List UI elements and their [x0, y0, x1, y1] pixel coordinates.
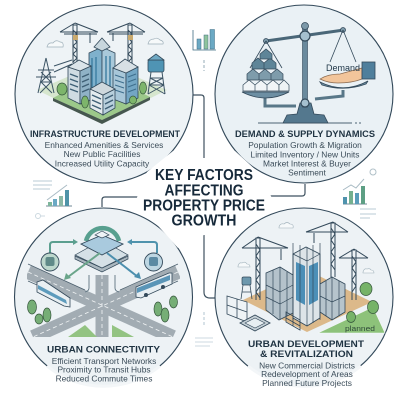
- illustration: balance scale: [242, 22, 375, 123]
- text: development details: Planned Future Projects: [262, 378, 352, 388]
- panel: urban connectivity: [14, 208, 192, 386]
- icon: crane three: [339, 249, 368, 300]
- title: KEY FACTORS: [155, 167, 253, 184]
- text: development details: New Commercial Districts: [259, 360, 355, 370]
- icon: train: [37, 280, 70, 307]
- heading: urban development and revitalization: [248, 339, 364, 360]
- icon: house stack: [243, 49, 289, 91]
- text: infrastructure details: Enhanced Amenities & Services: [45, 140, 163, 150]
- title: [143, 167, 265, 230]
- title: GROWTH: [172, 212, 236, 230]
- chart icon: left: [33, 181, 72, 206]
- label: demand: Demand: [326, 63, 360, 73]
- heading: urban development and revitalization: & REVITALIZATION: [260, 349, 353, 360]
- chart icon: right: [343, 169, 376, 218]
- text: demand details: Limited Inventory / New Units: [251, 150, 359, 160]
- text: connectivity details: [52, 356, 156, 384]
- icon: crane two: [306, 222, 348, 277]
- text: development details: [259, 360, 355, 388]
- panel: infrastructure development: [15, 5, 193, 183]
- text: infrastructure details: [45, 140, 163, 168]
- heading: urban development and revitalization: URBAN DEVELOPMENT: [248, 339, 364, 350]
- decorative marks: [36, 214, 213, 346]
- text: connectivity details: Reduced Commute Times: [56, 374, 152, 384]
- heading: urban connectivity: URBAN CONNECTIVITY: [47, 344, 161, 356]
- connector lines: [102, 95, 305, 298]
- text: infrastructure details: Increased Utility Capacity: [55, 158, 150, 168]
- icon: bus: [136, 273, 172, 298]
- title: PROPERTY PRICE: [143, 198, 265, 214]
- text: demand details: [248, 140, 362, 178]
- icon: trees: [28, 296, 178, 324]
- label: planned: planned: [345, 324, 375, 333]
- icon: crane one: [242, 237, 288, 300]
- text: demand details: Population Growth & Migration: [248, 140, 362, 150]
- title: AFFECTING: [164, 182, 244, 200]
- illustration: transit hub and roads: [28, 228, 178, 337]
- panel: demand and supply dynamics: [215, 5, 393, 183]
- text: demand details: Market Interest & Buyer: [263, 158, 351, 168]
- text: infrastructure details: New Public Facilities: [64, 149, 140, 159]
- icon: trees: [346, 282, 378, 322]
- text: connectivity details: Proximity to Transit Hubs: [57, 364, 151, 374]
- chart icon: top centre: [193, 30, 216, 50]
- text: development details: Redevelopment of Areas: [261, 369, 353, 379]
- heading: demand and supply: DEMAND & SUPPLY DYNAMICS: [235, 129, 376, 140]
- heading: infrastructure development: INFRASTRUCTURE DEVELOPMENT: [30, 129, 180, 140]
- arrows: routes: [50, 242, 157, 277]
- text: demand details: Sentiment: [288, 168, 327, 178]
- illustration: city with cranes: [36, 23, 167, 124]
- text: connectivity details: Efficient Transport Networks: [52, 356, 156, 366]
- panel: urban development and revitalization: [215, 208, 393, 388]
- illustration: construction site: [227, 222, 385, 333]
- icon: bus badge: [144, 253, 162, 271]
- icon: train badge: [41, 253, 59, 271]
- title backdrop: [136, 151, 272, 248]
